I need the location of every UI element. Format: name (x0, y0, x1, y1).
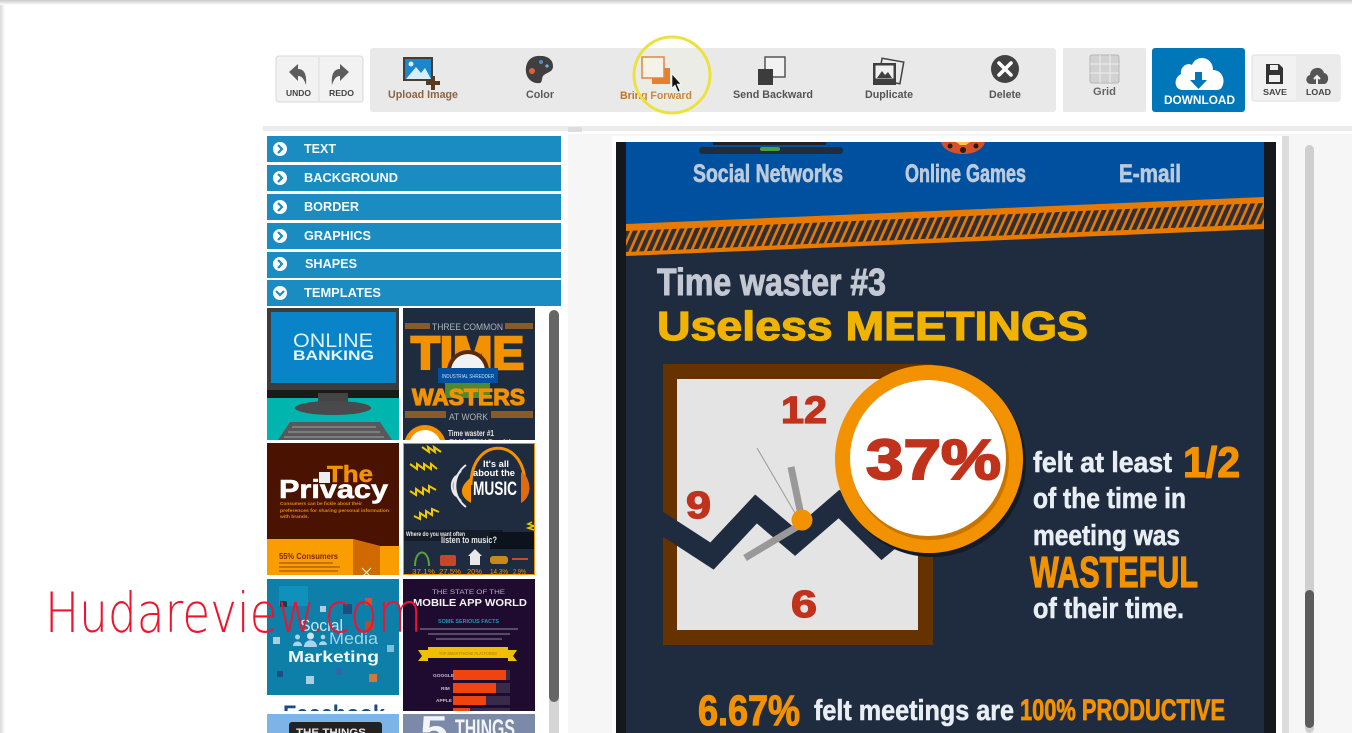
template: time wasters (403, 308, 535, 440)
template: music: about the (473, 468, 515, 478)
label: delete: Delete (989, 89, 1021, 101)
template: music: MUSIC (473, 479, 517, 500)
text block: wasteful stat: of the time in (1033, 483, 1186, 515)
template: social media marketing: Media (329, 629, 379, 648)
template: online banking (267, 308, 399, 440)
button: download: DOWNLOAD (1164, 95, 1235, 107)
template: music: 2.9% (513, 567, 526, 576)
template: time wasters: Time waster #1 (448, 429, 494, 438)
blue header band (626, 142, 1264, 228)
hazard stripe (626, 197, 1264, 256)
template: mobile app world: THE STATE OF THE (432, 589, 506, 596)
toolbar: save and load: SAVE (1263, 87, 1287, 97)
canvas: infographic page (612, 136, 1289, 733)
heading: time waster #3: Time waster #3 (657, 262, 886, 304)
template: music: It's all (483, 459, 509, 469)
template: time wasters: WASTERS (412, 384, 525, 410)
text block: productive stat: felt meetings are (814, 695, 1014, 727)
menu item: border (267, 194, 561, 220)
template: music: 14.3% (490, 567, 508, 576)
callout: 37% badge (835, 365, 1026, 557)
template: music: Where do you want often (406, 531, 465, 538)
text block: wasteful stat: of their time. (1033, 593, 1184, 625)
text block: wasteful stat: meeting was (1033, 520, 1180, 552)
template: mobile app world: MOBILE APP WORLD (413, 597, 527, 609)
template: time wasters: THREE COMMON (432, 322, 503, 332)
template: online banking: ONLINE (293, 331, 373, 352)
template: mobile app world: SOME SERIOUS FACTS (438, 619, 499, 625)
icon: duplicate (873, 58, 904, 85)
canvas scrollbar (1305, 145, 1314, 733)
highlight: yellow circle (634, 37, 710, 113)
label: bring forward: Bring Forward (620, 90, 692, 102)
template: mobile app world (403, 579, 535, 713)
template: music: listen to music? (441, 535, 497, 545)
menu item: background (267, 165, 561, 191)
template: mobile app world: RIM (441, 686, 450, 692)
icon: online games dial (941, 142, 985, 154)
template: privacy (267, 443, 399, 577)
icon: mouse cursor (672, 74, 681, 92)
clock illustration (655, 364, 933, 645)
menu item: templates (267, 280, 561, 306)
menu item: templates: TEMPLATES (304, 286, 381, 300)
template: privacy: with brands. (279, 514, 309, 520)
template: mobile app world: GOOGLE (433, 673, 455, 679)
menu item: shapes: SHAPES (305, 257, 357, 271)
sidebar accordion menu (267, 136, 561, 306)
toolbar: save and load (1252, 55, 1340, 101)
template: privacy: The (327, 461, 373, 487)
clock hands (745, 448, 812, 558)
template: privacy: Privacy (279, 474, 389, 504)
menu item: background: BACKGROUND (304, 171, 398, 185)
template: time wasters: TIME (411, 327, 524, 379)
label: e-mail: E-mail (1119, 160, 1181, 188)
watermark: Hudareview.com (45, 581, 422, 645)
label: color: Color (526, 89, 555, 101)
menu item: graphics (267, 223, 561, 249)
template: social media marketing (267, 579, 399, 711)
template: the things (267, 714, 399, 733)
menu item: graphics: GRAPHICS (304, 229, 371, 243)
text block: productive stat: 100% PRODUCTIVE (1020, 694, 1225, 727)
icon: social networks device (699, 142, 843, 154)
template: music (403, 443, 535, 576)
label: upload image: Upload Image (388, 89, 458, 101)
icon: colour palette (526, 56, 553, 83)
menu item: text: TEXT (304, 142, 336, 156)
template: privacy: preferences for sharing personal information (280, 508, 389, 514)
icon: bring forward (642, 57, 670, 84)
divider band and workspace background (263, 126, 1352, 733)
button: download (1152, 48, 1245, 112)
clock numeral 6: 6 (791, 584, 817, 626)
toolbar: undo and redo (276, 56, 363, 102)
toolbar: main tools (370, 48, 1056, 112)
menu item: shapes (267, 252, 561, 278)
toolbar: grid: Grid (1093, 86, 1116, 98)
text block: wasteful stat: 1/2 (1183, 439, 1240, 487)
callout: 37% badge: 37% (866, 428, 1001, 492)
template: privacy: 55% Consumers (279, 551, 338, 561)
label: online games: Online Games (905, 160, 1026, 188)
template: music: 20% (467, 567, 482, 576)
menu item: text (267, 136, 561, 162)
template: music: 37.1% (412, 567, 435, 576)
template: social media marketing: Facebook (283, 701, 386, 728)
toolbar: undo and redo: UNDO (286, 88, 311, 98)
text block: wasteful stat: WASTEFUL (1030, 548, 1198, 597)
clock numeral 9: 9 (686, 485, 711, 527)
template: social media marketing: Marketing (288, 649, 379, 666)
clock numeral 12: 12 (781, 390, 827, 432)
toolbar: save and load: LOAD (1306, 87, 1331, 97)
template: time wasters: INDUSTRIAL SHREDDER (442, 374, 494, 380)
template: privacy: Consumers can be fickle about their (280, 501, 362, 507)
toolbar: undo and redo: REDO (329, 88, 354, 98)
icon: upload image (404, 58, 440, 90)
label: social networks: Social Networks (693, 160, 843, 188)
template: mobile app world: APPLE (436, 698, 453, 704)
sidebar scrollbar (549, 310, 559, 733)
toolbar: grid (1063, 48, 1146, 112)
template: 5 things (403, 714, 535, 733)
heading: useless meetings: Useless MEETINGS (657, 303, 1088, 349)
text block: wasteful stat: felt at least (1033, 447, 1172, 479)
icon: send backward (758, 57, 785, 85)
icon: delete (991, 55, 1019, 83)
template: time wasters: AT WORK (449, 412, 489, 423)
template: mobile app world: TOP SMARTPHONE PLATFORMS (439, 651, 497, 656)
template: time wasters: CHATTING with (448, 438, 514, 447)
label: send backward: Send Backward (733, 89, 813, 101)
zigzag trend line (655, 504, 907, 556)
menu item: border: BORDER (304, 200, 359, 214)
label: duplicate: Duplicate (865, 89, 913, 101)
template: music: 27.5% (439, 567, 461, 576)
text block: productive stat (698, 694, 1224, 726)
template: online banking: BANKING (293, 347, 374, 363)
text block: wasteful stat (1030, 439, 1240, 625)
template: social media marketing: Social (300, 616, 343, 635)
